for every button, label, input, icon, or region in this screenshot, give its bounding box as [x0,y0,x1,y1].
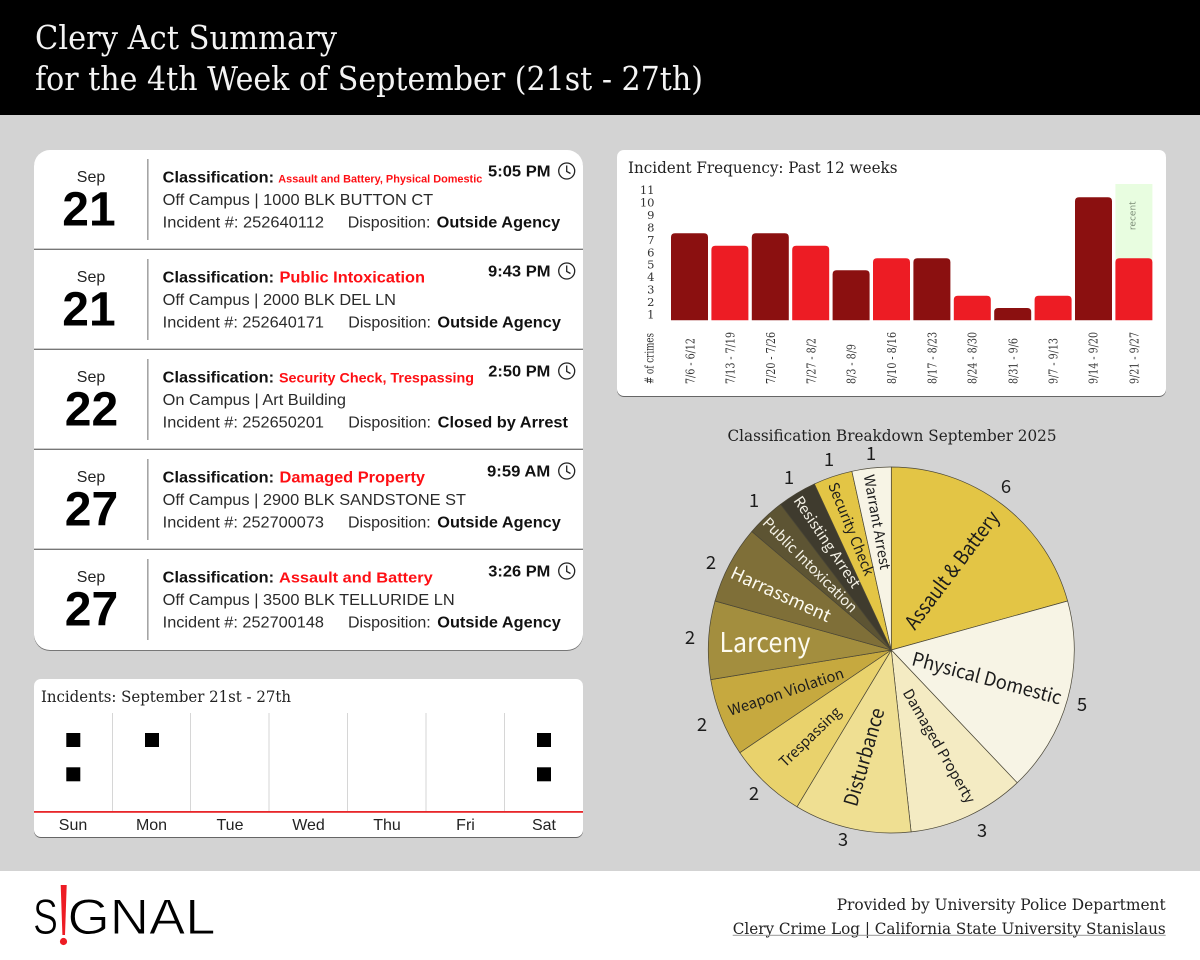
slice labels: Trespassing [774,702,845,772]
incident row 2: 9:43 PM [488,264,550,281]
y axis title: # of crimes [642,333,656,384]
y axis labels: 11 [640,183,654,197]
strip heading: Incidents: September 21st - 27th [41,688,291,706]
x axis labels: 7/20 - 7/26 [764,332,778,384]
y axis labels: 2 [647,295,654,309]
incident row 4: Disposition: [348,514,431,532]
incident row 4: Sep [77,469,105,486]
incident row 3: Security Check, Trespassing [279,370,474,386]
slice counts: 6 [1001,473,1011,499]
slice counts: 2 [749,780,759,806]
day labels: Thu [373,817,401,834]
bars [671,197,1152,320]
incident row 3: Classification: [163,370,274,386]
y axis labels: 7 [647,233,654,247]
slice labels: Damaged Property [898,685,981,807]
title: for the 4th Week of September (21st - 27th) [35,59,703,98]
incident row 4 [65,459,575,540]
y axis labels: 4 [647,270,654,284]
slice labels: Warrant Arrest [859,473,896,572]
day labels: Wed [292,817,325,834]
y axis labels: 5 [647,258,654,272]
incident row 2: Public Intoxication [280,270,425,286]
day labels: Tue [217,817,244,834]
incident row 5: Sep [77,569,105,586]
y axis labels: 6 [647,245,654,259]
x axis labels: 8/31 - 9/6 [1006,338,1020,384]
x axis labels: 7/27 - 8/2 [804,338,818,384]
x axis labels: 8/3 - 8/9 [844,344,858,384]
incident row 1: Assault and Battery, Physical Domestic [278,174,482,186]
source credit: Provided by University Police Department [837,896,1166,914]
incident row 1: Incident #: 252640112 [163,214,324,232]
x axis labels: 8/17 - 8/23 [926,332,940,384]
recent week highlight: recent [1128,201,1138,230]
source credit: Clery Crime Log | California State University Stanislaus [733,920,1166,938]
incident row 3: Sep [77,369,105,386]
pie slices [708,467,1074,833]
incident row 5: Incident #: 252700148 [163,614,324,632]
slice counts [685,440,1087,852]
incident row 5: Classification: [163,570,274,586]
incident row 3 [65,359,575,440]
incident row 2: Incident #: 252640171 [163,314,324,332]
x axis labels: 9/21 - 9/27 [1128,332,1142,384]
recent week highlight [1115,184,1152,260]
incident row 5: Disposition: [348,614,431,632]
incident row 5: Assault and Battery [279,570,433,586]
slice counts: 2 [685,624,695,650]
logo [33,885,216,945]
incident row 1: 21 [62,184,116,236]
logo: GNAL [68,889,216,945]
incident row 5: 27 [65,584,118,636]
y axis labels: 1 [647,307,654,321]
day labels: Sun [59,817,87,834]
slice labels [720,473,1065,809]
incident row 3: Closed by Arrest [438,414,569,432]
incident row 4: Outside Agency [437,514,561,532]
incident row 2: Outside Agency [437,314,561,332]
incident row 1: Off Campus | 1000 BLK BUTTON CT [163,192,433,209]
slice counts: 2 [697,711,707,737]
x axis labels: 9/7 - 9/13 [1046,338,1060,384]
slice counts: 1 [749,487,759,513]
slice counts: 1 [784,464,794,490]
slice labels: Physical Domestic [909,645,1065,711]
panel: classification pie [685,427,1087,852]
incident row 4: 9:59 AM [487,464,550,481]
incident row 3: 2:50 PM [488,364,550,381]
slice labels: Resisting Arrest [789,491,866,592]
slice labels: Harrassment [727,560,836,628]
x axis labels: 7/13 - 7/19 [724,332,738,384]
incident row 2: Classification: [163,270,274,286]
pie heading: Classification Breakdown September 2025 [728,427,1056,445]
incident row 1 [62,159,575,240]
panel: weekly incidents strip [34,679,583,838]
x axis labels: 8/24 - 8/30 [966,332,980,384]
day labels: Fri [456,817,475,834]
incident row 5: Off Campus | 3500 BLK TELLURIDE LN [163,592,455,609]
chart heading: Incident Frequency: Past 12 weeks [628,159,898,177]
slice labels: Public Intoxication [758,512,863,617]
slice labels: Assault & Battery [896,503,1005,635]
incident row 2: Sep [77,269,105,286]
x axis labels: 8/10 - 8/16 [885,332,899,384]
source credit [733,896,1166,938]
slice counts: 1 [824,446,834,472]
y axis labels: 8 [647,220,654,234]
incident row 1: 5:05 PM [488,164,550,181]
incident row 2: Off Campus | 2000 BLK DEL LN [163,292,396,309]
incident row 2 [62,259,575,340]
y axis labels: 10 [640,196,654,210]
incident row 1: Disposition: [348,214,430,232]
x axis labels [684,332,1142,384]
y axis labels [640,183,654,321]
slice counts: 3 [977,817,987,843]
slice counts: 1 [866,440,876,466]
incident row 2: 21 [62,284,116,336]
y axis labels: 9 [647,208,654,222]
incident row 4: Classification: [163,470,274,486]
incident row 4: Damaged Property [280,470,425,486]
incident row 1: Sep [77,169,105,186]
slice labels: Larceny [720,621,810,660]
incident row 3: On Campus | Art Building [163,392,346,409]
slice labels: Weapon Violation [725,662,847,721]
day labels [59,817,557,834]
y axis labels: 3 [647,283,654,297]
title: Clery Act Summary [35,18,337,57]
x axis labels: 9/14 - 9/20 [1086,332,1100,384]
incident row 4: 27 [65,484,118,536]
header banner [0,0,1200,115]
incident row 3: 22 [65,384,118,436]
panel: incident frequency chart [617,150,1166,397]
day labels: Sat [532,817,557,834]
slice labels: Disturbance [835,704,890,809]
slice counts: 5 [1077,691,1087,717]
incident row 1: Outside Agency [437,214,560,232]
logo: S [33,889,58,945]
x axis labels: 7/6 - 6/12 [684,338,698,384]
incident row 5: 3:26 PM [488,564,550,581]
slice labels: Security Check [823,479,880,579]
incident row 4: Off Campus | 2900 BLK SANDSTONE ST [163,492,466,509]
footer [0,871,1200,960]
incident row 3: Incident #: 252650201 [163,414,324,432]
incident row 1: Classification: [163,170,274,186]
incident row 5 [65,559,575,640]
slice counts: 2 [706,549,716,575]
incident markers [66,733,551,781]
incident row 2: Disposition: [348,314,431,332]
incident row 3: Disposition: [348,414,431,432]
incident row 4: Incident #: 252700073 [163,514,324,532]
slice counts: 3 [838,826,848,852]
incident row 5: Outside Agency [437,614,561,632]
day labels: Mon [136,817,167,834]
panel: incident list [34,150,583,651]
